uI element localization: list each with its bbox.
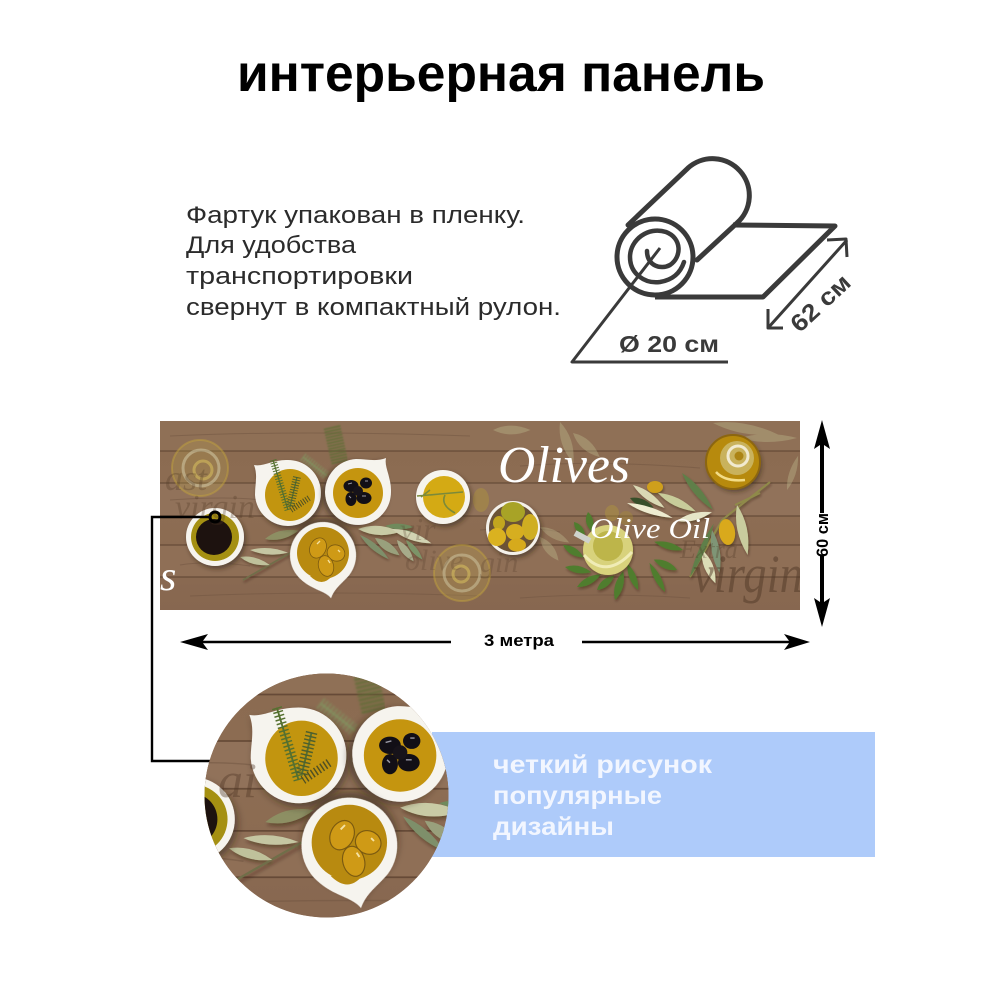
glass of olive oil xyxy=(575,525,633,575)
blue feature band xyxy=(432,732,875,857)
feature text xyxy=(493,751,713,841)
dimension: length 3 metres: 3 метра xyxy=(484,631,555,650)
faded script lettering: vir xyxy=(400,511,436,547)
dimension: length 3 metres xyxy=(180,631,810,650)
faded glass lower xyxy=(434,545,490,601)
script: Olives: Olives xyxy=(498,437,630,494)
icon: rolled panel with dimensions xyxy=(572,159,856,362)
size label: width: 62 см xyxy=(785,269,856,338)
decorative panel strip xyxy=(160,418,803,610)
faded script lettering: virgin xyxy=(175,489,255,526)
faded script lettering: virgin xyxy=(693,544,803,604)
bowl: yellow-green olives xyxy=(486,501,540,555)
faded script lettering: Extra xyxy=(679,535,738,564)
callout connector line xyxy=(152,512,220,761)
dimension: height 60 cm: 60 см xyxy=(813,513,832,557)
thyme sprig xyxy=(303,427,340,476)
description text: свернут в компактный рулон. xyxy=(186,294,561,321)
wood background xyxy=(160,421,800,610)
dimension: height 60 cm xyxy=(813,420,832,627)
bowl: dark paste xyxy=(186,508,244,566)
feature text: дизайны xyxy=(493,813,614,841)
bowl: black olives xyxy=(325,458,391,525)
description text xyxy=(186,202,561,321)
script: trailing s: s xyxy=(160,554,176,600)
title: интерьерная панель xyxy=(237,45,765,103)
faded script lettering xyxy=(165,458,803,604)
faded glass left xyxy=(172,440,228,496)
bowl: small yellow with sprig xyxy=(416,470,470,524)
faded script lettering: ast xyxy=(165,458,208,498)
faded script lettering: gin xyxy=(480,546,518,579)
description text: транспортировки xyxy=(186,263,413,290)
feature text: популярные xyxy=(493,782,662,810)
magnified circle detail xyxy=(204,674,448,918)
green leaves around glass xyxy=(561,511,684,601)
script: Olive Oil: Olive Oil xyxy=(590,513,710,545)
description text: Для удобства xyxy=(186,232,357,259)
bowl: rosemary xyxy=(254,460,321,526)
size label: diameter: Ø 20 см xyxy=(619,331,719,357)
magnified circle detail: ai xyxy=(218,752,257,808)
faded script lettering: olive xyxy=(405,544,463,577)
bowl: green olives in oil xyxy=(277,509,370,602)
feature text: четкий рисунок xyxy=(493,751,713,779)
olive leaves centre xyxy=(239,523,433,580)
olive branch right xyxy=(626,471,770,585)
faded leaves xyxy=(473,418,801,563)
amber oil bottle xyxy=(706,435,760,489)
description text: Фартук упакован в пленку. xyxy=(186,202,525,229)
